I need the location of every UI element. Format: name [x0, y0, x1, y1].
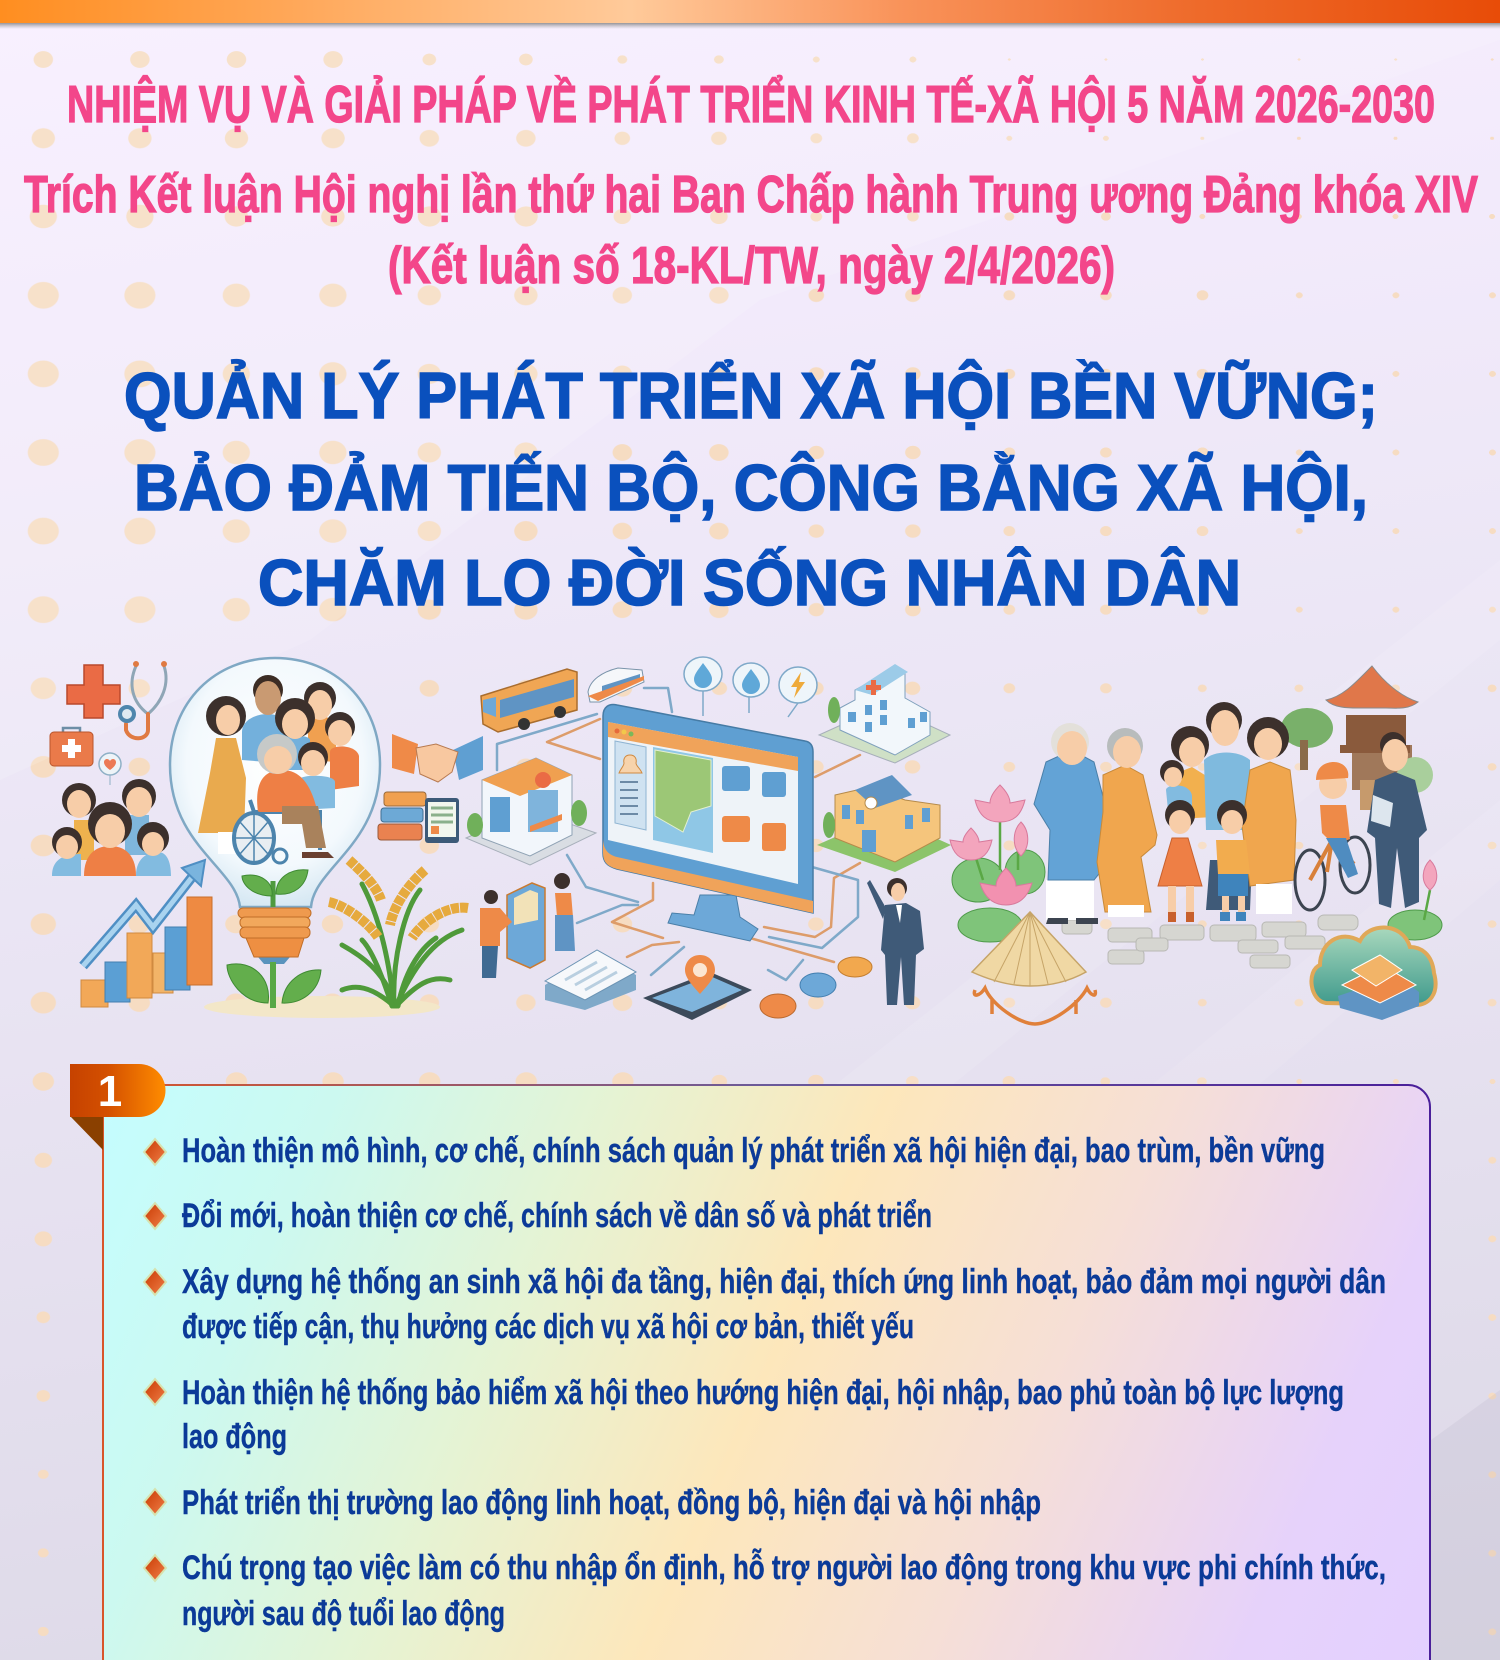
bullet: social security: [144, 1263, 1386, 1346]
person: businesswoman presenting: [867, 878, 924, 1005]
icon: tablet with list: [425, 798, 459, 843]
icon: light bulb with family inside: [170, 658, 380, 907]
icon: cloud with books: [1311, 927, 1436, 1020]
person: mother in orange ao dai: [1242, 717, 1296, 914]
icon: hospital building: [466, 758, 596, 865]
icon: seedling: [227, 962, 321, 1008]
person: father in blue shirt: [1204, 702, 1252, 910]
number badge: [70, 1064, 166, 1150]
icon: city hospital tower: [819, 664, 950, 763]
title: pink conclusion heading: [24, 75, 1478, 295]
person: girl in orange dress: [1158, 800, 1202, 922]
icon: map pin tablet: [643, 955, 752, 1020]
bullet list: [144, 1132, 1386, 1633]
icon: lotus flowers and leaves: [950, 785, 1045, 942]
person: boy in yellow shirt: [1216, 800, 1250, 921]
icon: first aid kit: [50, 728, 93, 766]
icon: bulb screw base: [238, 908, 311, 964]
heading: blue main title: BẢO ĐẢM TIẾN BỘ, CÔNG BẰNG XÃ HỘI,: [134, 451, 1368, 524]
person: grandmother in wheelchair: [234, 734, 334, 863]
icon: train: [588, 668, 644, 702]
person: grandfather in blue ao dai: [1034, 723, 1106, 924]
bullet: stable jobs: người sau độ tuổi lao động: [182, 1595, 505, 1633]
bullet: population policy: Đổi mới, hoàn thiện cơ chế, chính sách về dân số và phát triển: [182, 1197, 932, 1235]
circuit lines: [497, 688, 860, 980]
icon: orange bus: [481, 669, 577, 732]
bullet: stable jobs: [144, 1549, 1386, 1633]
panel border: [103, 1085, 1430, 1660]
person: boy riding bicycle: [1295, 762, 1370, 910]
icon: heart bubble: [99, 753, 121, 785]
illustration: ground patch: [204, 996, 440, 1018]
person: grandmother in orange ao dai: [1097, 728, 1157, 917]
chart: rising bars with arrow: [81, 860, 212, 1007]
icon: stethoscope: [120, 662, 166, 738]
icon: school building: [817, 775, 951, 872]
panel: section 1: [70, 1064, 1430, 1660]
bullet: social insurance: [144, 1374, 1344, 1456]
person: young woman: [275, 698, 315, 770]
icon: rice plant: [329, 860, 468, 1006]
icon: stack of books: [378, 792, 426, 840]
icon: conical hat with ribbon: [972, 912, 1095, 1024]
number badge: 1: [98, 1067, 122, 1116]
icon: red medical cross: [67, 665, 120, 718]
top orange bar: [0, 0, 1500, 29]
person: woman in yellow ao dai: [198, 696, 246, 854]
heading: blue main title: QUẢN LÝ PHÁT TRIỂN XÃ HỘI BỀN VỮNG;: [124, 359, 1378, 432]
person: boy in orange: [325, 712, 359, 790]
panel background: [103, 1085, 1430, 1660]
icon: handshake: [392, 734, 483, 782]
icon: coins: [760, 957, 872, 1018]
people: family of five: [52, 779, 171, 876]
icon: utility bubbles water and energy: [684, 657, 817, 717]
heading: blue main title: CHĂM LO ĐỜI SỐNG NHÂN DÂN: [258, 546, 1241, 619]
person: mother holding baby: [1160, 726, 1214, 819]
icon: sprout inside bulb: [242, 870, 308, 907]
people: man and woman at kiosk: [480, 873, 575, 978]
icon: lotus bud and leaf: [1388, 860, 1442, 940]
illustration: social development scene: [50, 657, 1442, 1024]
person: boy in blue: [298, 742, 335, 810]
person: young man in orange: [304, 682, 336, 762]
bullet: social insurance: lao động: [182, 1418, 287, 1456]
bullet: labour market: Phát triển thị trường lao động linh hoạt, đồng bộ, hiện đại và hội nhập: [182, 1484, 1041, 1522]
illustration: pagoda and tree: [1281, 666, 1433, 810]
icon: computer monitor with portal: [603, 704, 813, 941]
icon: paving stones: [1062, 915, 1358, 968]
heading: blue main title: [124, 359, 1378, 619]
person: man in blue: [242, 675, 292, 764]
person: man in suit with tablet: [1367, 732, 1427, 908]
icon: stack of documents: [545, 950, 636, 1010]
title: pink conclusion heading: (Kết luận số 18-KL/TW, ngày 2/4/2026): [388, 237, 1115, 295]
bullet: social security: được tiếp cận, thụ hưởng các dịch vụ xã hội cơ bản, thiết yếu: [182, 1308, 914, 1346]
